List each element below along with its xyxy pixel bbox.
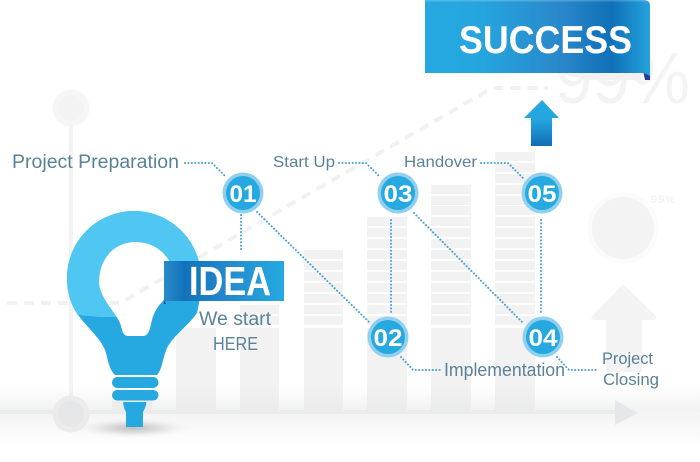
step 01: 01: [230, 181, 256, 208]
background gauge: 99%: [651, 194, 675, 206]
arrow: up to success: [524, 100, 559, 146]
floor band: [0, 385, 700, 447]
step 05: [522, 172, 562, 214]
step 02: 02: [374, 325, 402, 352]
label: project closing: Closing: [603, 370, 659, 389]
text: we start here: [199, 309, 272, 354]
step 03: 03: [384, 181, 412, 208]
label: project closing: [602, 349, 659, 389]
step 04: [522, 316, 564, 358]
step 04: 04: [528, 325, 558, 352]
idea banner: IDEA: [189, 258, 271, 304]
success banner: [425, 0, 650, 80]
label: project closing: Project: [602, 349, 653, 368]
step 05: 05: [528, 181, 556, 208]
background bars: [112, 152, 535, 411]
step 01: [222, 172, 264, 214]
label: project preparation: Project Preparation: [12, 152, 179, 173]
background gauge: [588, 192, 675, 264]
icon: light bulb: [67, 211, 201, 438]
background up arrow: [591, 284, 656, 372]
text: we start here: We start: [199, 309, 272, 330]
dotted connector lines: [185, 163, 598, 370]
success banner: SUCCESS: [459, 19, 632, 62]
label: handover: Handover: [404, 154, 478, 171]
background vertical axis: [52, 90, 90, 410]
background dashed growth line: [7, 88, 548, 303]
label: implementation: Implementation: [444, 360, 565, 380]
background big 99 percent: 99%: [555, 39, 690, 119]
label: start up: Start Up: [273, 154, 335, 171]
step 02: [368, 316, 408, 358]
step 03: [378, 172, 418, 214]
text: we start here: HERE: [213, 334, 258, 354]
